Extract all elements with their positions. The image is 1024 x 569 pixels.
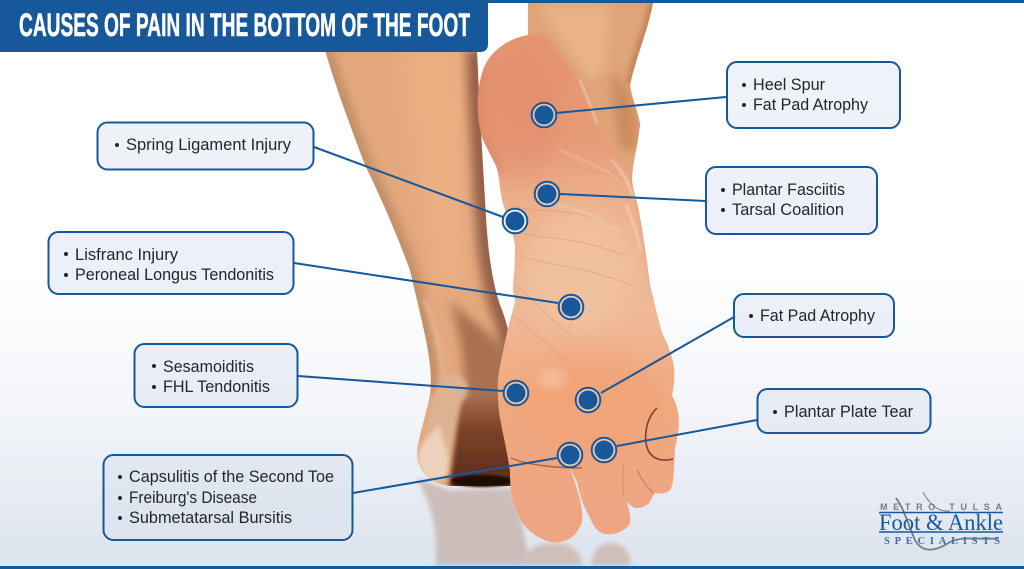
callout: heel spur: Heel Spur — [753, 76, 825, 94]
callout: fat pad atrophy — [734, 294, 894, 337]
callout: fat pad atrophy: Fat Pad Atrophy — [760, 307, 876, 325]
logo: Foot & Ankle — [879, 510, 1003, 535]
marker: forefoot fat pad — [576, 388, 600, 412]
marker: sesamoid — [504, 381, 528, 405]
logo — [879, 492, 1003, 550]
callout: sesamoiditis: Sesamoiditis — [163, 358, 254, 376]
callout: lisfranc injury: Peroneal Longus Tendonitis — [75, 266, 274, 284]
logo: METRO TULSA — [880, 502, 1002, 512]
pale streaks — [580, 80, 640, 250]
heel upper pale — [426, 374, 470, 454]
illustration: foot sole — [478, 0, 679, 542]
marker: second toe — [558, 443, 582, 467]
ankle top highlight — [546, 6, 608, 76]
callout: lisfranc injury — [48, 232, 294, 294]
callout: capsulitis: Freiburg's Disease — [129, 489, 257, 507]
callout: plantar plate tear: Plantar Plate Tear — [784, 403, 913, 421]
ball redness — [538, 354, 642, 442]
callout: capsulitis: Capsulitis of the Second Toe — [129, 468, 334, 486]
marker: plantar plate — [592, 438, 616, 462]
heel redness — [494, 93, 548, 174]
illustration: rear leg — [326, 52, 510, 489]
ankle side — [524, 3, 653, 284]
toe creases — [511, 458, 582, 468]
arch highlight — [530, 209, 630, 326]
callout: spring ligament injury — [98, 122, 314, 170]
logo: SPECIALISTS — [884, 536, 1000, 547]
callout: capsulitis: Submetatarsal Bursitis — [129, 509, 292, 527]
marker: plantar fascia — [535, 182, 559, 206]
lower calf shade — [448, 301, 502, 402]
pale highlight on ball — [538, 368, 566, 388]
callout: heel spur — [727, 62, 900, 128]
marker: spring ligament — [503, 209, 527, 233]
ankle right edge shade — [630, 3, 653, 85]
bottom rule — [0, 566, 1024, 569]
wrinkles — [510, 160, 632, 360]
marker: heel — [532, 103, 556, 127]
leg highlight — [416, 58, 455, 268]
pale rear heel — [418, 425, 449, 481]
top rule — [0, 0, 1024, 3]
title bar — [0, 0, 488, 52]
callout: plantar fasciitis: Tarsal Coalition — [732, 201, 844, 219]
callout: spring ligament injury: Spring Ligament Injury — [126, 136, 292, 154]
tendon highlight — [423, 300, 446, 380]
left edge shade — [478, 70, 498, 173]
callout: plantar plate tear — [758, 389, 930, 433]
dark arch fold — [612, 72, 637, 150]
callout: capsulitis — [104, 455, 352, 540]
callout: heel spur: Fat Pad Atrophy — [753, 96, 869, 114]
callout: lisfranc injury: Lisfranc Injury — [75, 246, 179, 264]
leg left edge shade — [325, 50, 431, 395]
title: CAUSES OF PAIN IN THE BOTTOM OF THE FOOT — [19, 7, 470, 43]
leg right edge shade — [477, 50, 512, 400]
dark arch — [445, 398, 510, 486]
callout: plantar fasciitis: Plantar Fasciitis — [732, 181, 845, 199]
reflection of feet on floor — [417, 478, 630, 566]
callout: sesamoiditis — [134, 344, 298, 407]
floor contact shadow — [451, 475, 513, 487]
marker: midfoot — [559, 295, 583, 319]
callout: plantar fasciitis — [706, 167, 877, 234]
callout: sesamoiditis: FHL Tendonitis — [163, 378, 270, 396]
leader lines — [294, 97, 757, 493]
